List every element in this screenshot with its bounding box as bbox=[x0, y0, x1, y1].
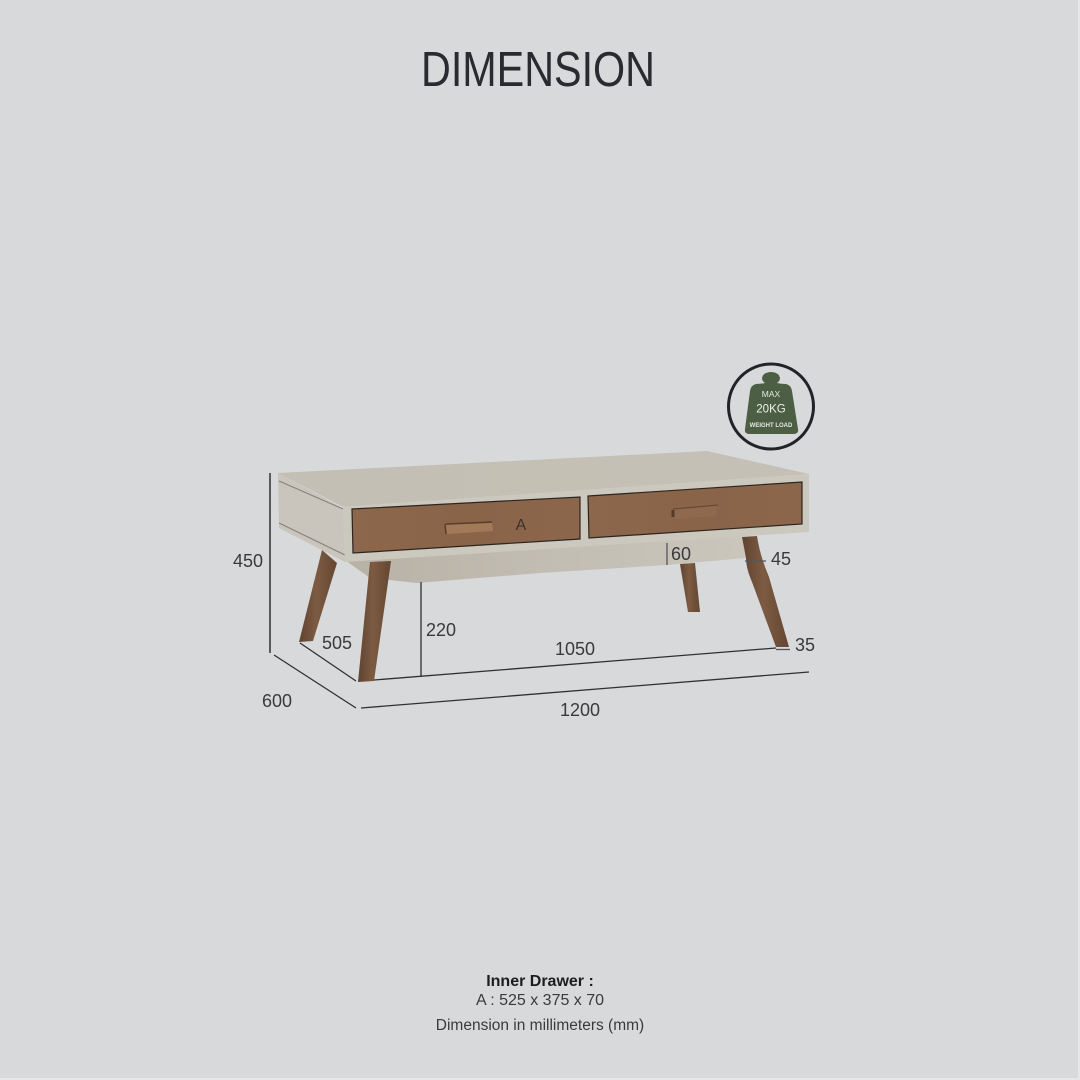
side panel bbox=[278, 473, 345, 562]
label 505: 505 bbox=[322, 633, 352, 653]
weight label: max: MAX bbox=[762, 389, 781, 399]
inner drawer size: A : 525 x 375 x 70 bbox=[476, 992, 604, 1009]
front left leg bbox=[358, 561, 391, 682]
right drawer handle bbox=[673, 505, 718, 519]
under apron bbox=[345, 535, 746, 583]
dimension lines bbox=[270, 473, 809, 708]
label 450: 450 bbox=[233, 551, 263, 571]
front right leg bbox=[742, 536, 789, 647]
label 1050: 1050 bbox=[555, 639, 595, 659]
label 220: 220 bbox=[426, 620, 456, 640]
back left leg bbox=[299, 550, 337, 642]
icon: max weight load badge bbox=[728, 364, 814, 449]
right drawer bbox=[588, 482, 802, 538]
left drawer bbox=[352, 497, 580, 553]
height line 450 bbox=[269, 473, 271, 653]
clearance line 220 bbox=[420, 582, 422, 677]
leg top line 45 bbox=[745, 560, 766, 562]
label 600: 600 bbox=[262, 691, 292, 711]
leg foot line 35 bbox=[776, 648, 790, 650]
inner drawer notes bbox=[436, 973, 644, 1034]
apron line 60 bbox=[666, 543, 668, 565]
depth line 505 bbox=[300, 643, 356, 681]
back right leg bbox=[680, 563, 700, 612]
title: DIMENSION bbox=[421, 43, 655, 97]
width line 1050 bbox=[374, 648, 776, 680]
label 1200: 1200 bbox=[560, 700, 600, 720]
coffee table bbox=[278, 451, 809, 682]
table top surface bbox=[278, 451, 809, 507]
weight label: weight load: WEIGHT LOAD bbox=[750, 423, 793, 429]
width line 1200 bbox=[361, 672, 809, 708]
label 45: 45 bbox=[771, 549, 791, 569]
depth line 600 bbox=[274, 655, 356, 708]
side panel groove lines bbox=[279, 481, 345, 555]
icon: weight shape bbox=[745, 372, 798, 434]
label 60: 60 bbox=[671, 544, 691, 564]
front frame bbox=[343, 474, 809, 562]
label 35: 35 bbox=[795, 635, 815, 655]
left drawer handle bbox=[445, 522, 493, 534]
drawer label A: A bbox=[516, 517, 527, 534]
inner drawer heading: Inner Drawer : bbox=[486, 973, 594, 990]
dimension labels bbox=[233, 544, 815, 720]
weight label: 20kg: 20KG bbox=[756, 404, 786, 416]
units note: Dimension in millimeters (mm) bbox=[436, 1017, 644, 1034]
